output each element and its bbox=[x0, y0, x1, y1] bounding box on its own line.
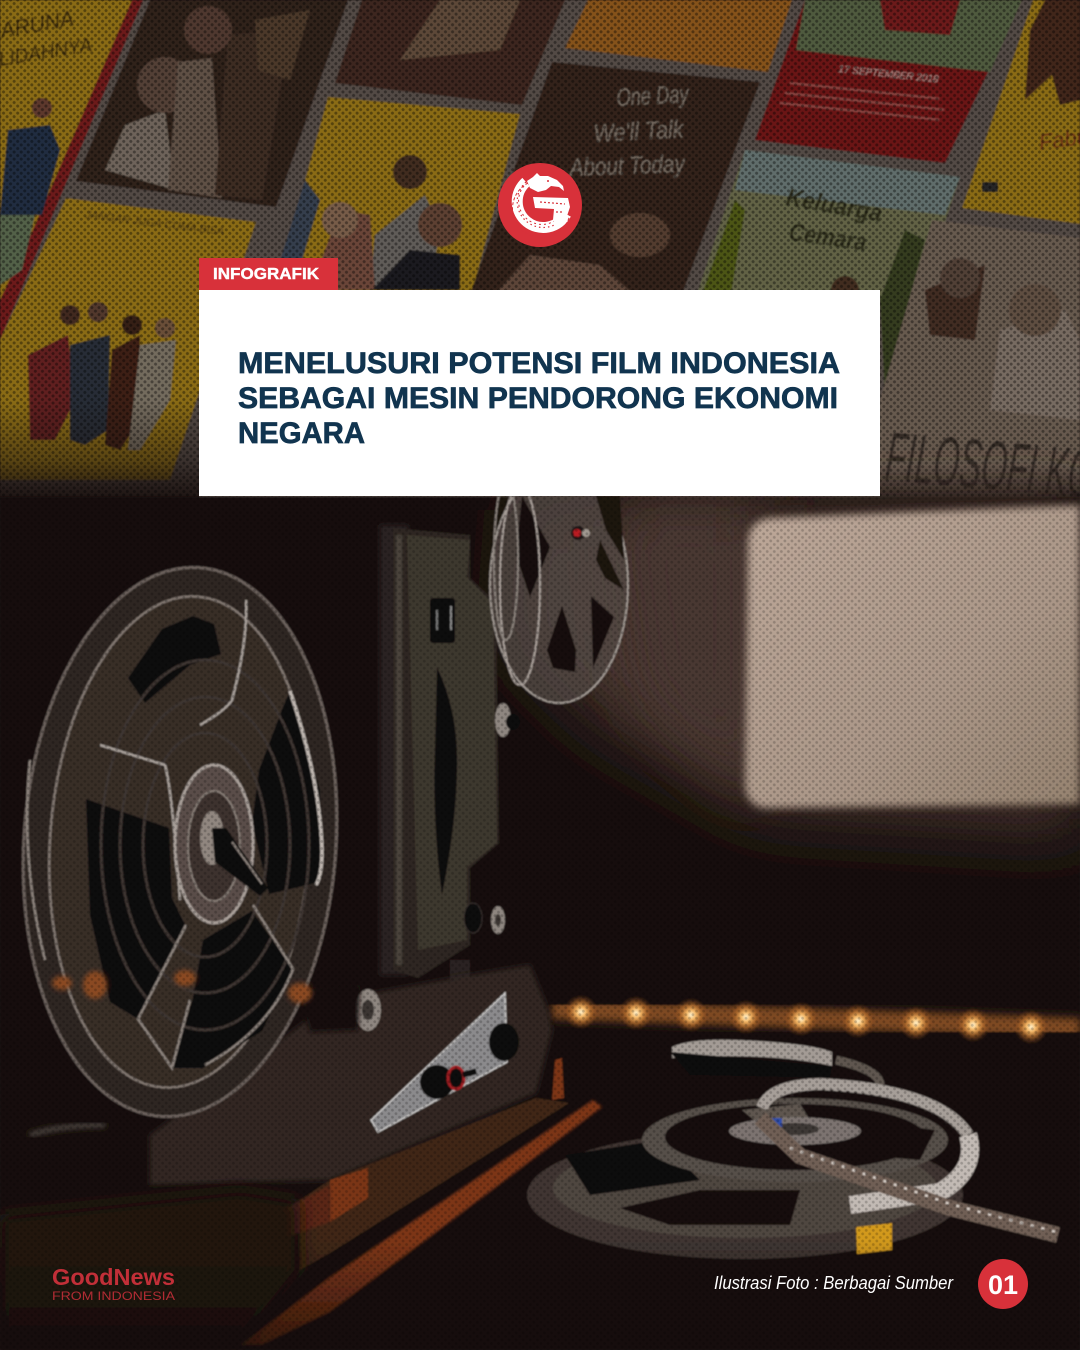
title: MENELUSURI POTENSI FILM INDONESIA bbox=[238, 347, 840, 380]
poster: One Day We'll Talk About Today: We'll Talk bbox=[593, 115, 685, 148]
projector light beam bbox=[520, 500, 1080, 830]
LED strip bbox=[552, 995, 1080, 1044]
projector body bbox=[380, 525, 520, 980]
page number: 01 bbox=[988, 1270, 1018, 1300]
poster: red and green: 17 SEPTEMBER 2018 bbox=[838, 64, 939, 86]
control panel bbox=[371, 993, 519, 1132]
poster: family photo bbox=[76, 0, 348, 207]
mesh and orange rim of base bbox=[0, 1058, 602, 1350]
photo: poster wall bbox=[0, 0, 1080, 516]
poster: Aruna dan Lidahnya bbox=[0, 0, 143, 340]
poster: yellow trio bbox=[268, 97, 520, 300]
upper reel bbox=[642, 1098, 948, 1182]
top reel bbox=[490, 467, 628, 703]
reel windows bbox=[86, 616, 320, 1068]
projector base bbox=[0, 965, 602, 1350]
logo eagle head bbox=[527, 173, 564, 192]
poster: Aruna dan Lidahnya: ARUNA bbox=[0, 5, 76, 43]
poster: top centre photo bbox=[335, 0, 565, 105]
bottom vignette bbox=[0, 1240, 1080, 1350]
brand: GoodNews from Indonesia: GoodNews bbox=[52, 1264, 175, 1290]
logo badge bbox=[498, 163, 582, 247]
tag: INFOGRAFIK bbox=[199, 258, 338, 290]
poster: Filosofi Kopi bbox=[880, 220, 1080, 516]
poster: Aruna dan Lidahnya: LIDAHNYA bbox=[0, 35, 94, 71]
tag: INFOGRAFIK: INFOGRAFIK bbox=[213, 266, 319, 283]
reel hub bbox=[175, 765, 253, 923]
brand: GoodNews from Indonesia bbox=[52, 1264, 175, 1303]
title bbox=[238, 347, 840, 450]
yellow film leader bbox=[856, 1223, 892, 1254]
reel highlights bbox=[27, 600, 322, 1068]
scene backdrop bbox=[0, 497, 1080, 1350]
reel knob bbox=[212, 828, 268, 896]
film tape coils bbox=[670, 1040, 1058, 1235]
poster: One Day We'll Talk About Today: About Today bbox=[568, 150, 686, 182]
photo: projector scene bbox=[0, 467, 1080, 1350]
reel orange glints bbox=[52, 970, 312, 1003]
brand: GoodNews from Indonesia: FROM INDONESIA bbox=[52, 1289, 175, 1303]
poster: red and green bbox=[755, 0, 1022, 163]
poster: One Day We'll Talk About Today: One Day bbox=[616, 80, 690, 112]
logo G bar bbox=[533, 197, 570, 228]
film reels on table bbox=[527, 1040, 1058, 1259]
reel concentric rings bbox=[101, 660, 309, 1030]
poster: Keluarga Cemara: Keluarga bbox=[784, 183, 884, 228]
poster wall dim overlay bbox=[0, 0, 1080, 500]
poster: Keluarga Cemara bbox=[695, 150, 960, 400]
large film reel bbox=[5, 557, 355, 1135]
projection screen bbox=[745, 505, 1080, 808]
poster: Fabula yellow bbox=[962, 0, 1080, 224]
title panel bbox=[199, 290, 880, 496]
poster: yellow group: JANGAN JUGA CUMA BISA bbox=[84, 209, 225, 238]
logo ring bbox=[512, 182, 570, 238]
poster: yellow group bbox=[0, 198, 256, 480]
title: NEGARA bbox=[238, 417, 365, 450]
page number bbox=[978, 1259, 1028, 1309]
photo credit: Ilustrasi Foto : Berbagai Sumber bbox=[714, 1273, 954, 1293]
title: SEBAGAI MESIN PENDORONG EKONOMI bbox=[238, 382, 838, 415]
poster: One Day We'll Talk About Today bbox=[468, 62, 760, 300]
poster: orange bbox=[565, 0, 792, 72]
poster wall fade bbox=[0, 400, 1080, 502]
poster: Keluarga Cemara: Cemara bbox=[787, 218, 868, 257]
lower reel bbox=[527, 1131, 963, 1259]
